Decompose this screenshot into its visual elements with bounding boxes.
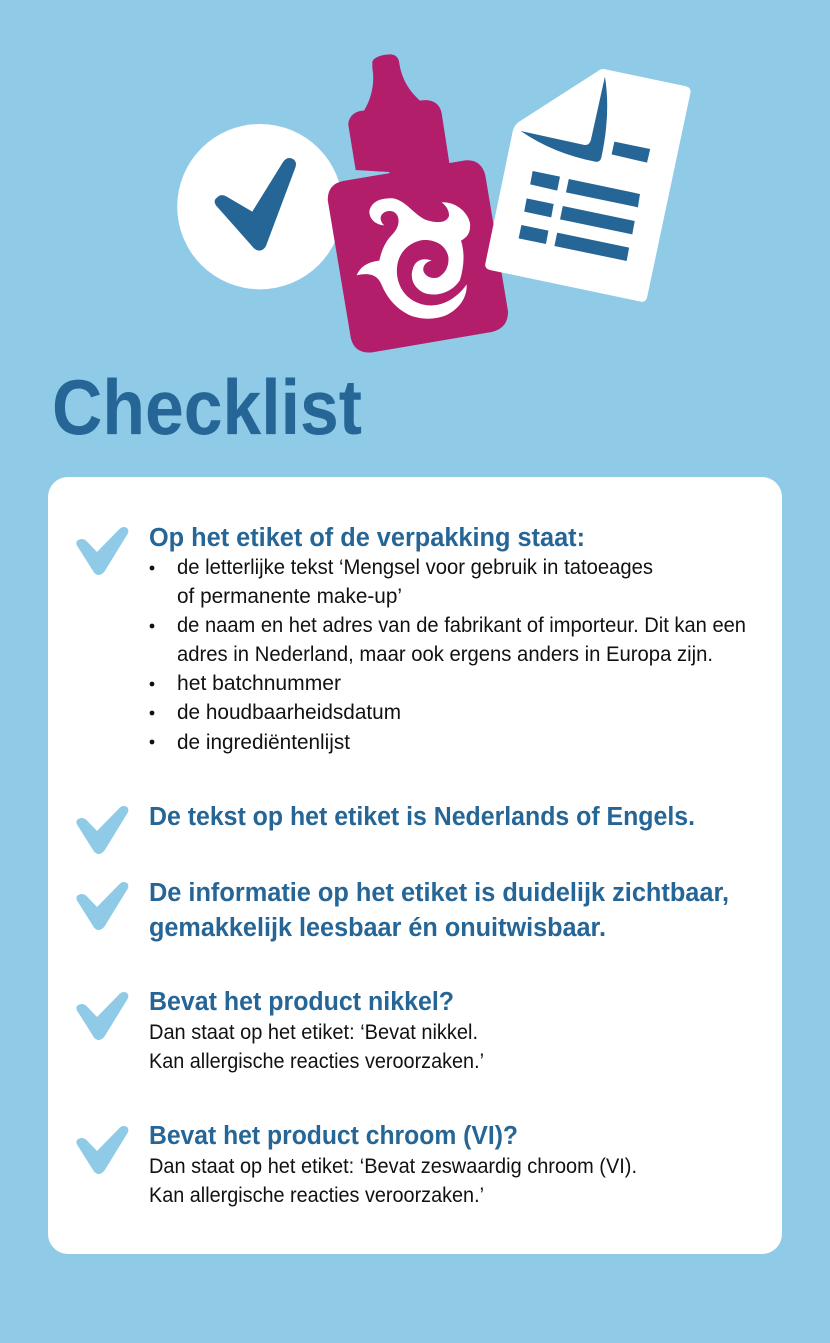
list: required label contents: de letterlijke tekst ‘Mengsel voor gebruik in tatoeages bbox=[177, 556, 653, 579]
text: chromium label wording: Dan staat op het etiket: ‘Bevat zeswaardig chroom (VI). bbox=[149, 1155, 637, 1178]
title: Checklist bbox=[52, 363, 362, 451]
icon: white circle with check bbox=[177, 124, 343, 289]
text: chromium label wording bbox=[149, 1155, 637, 1207]
icon: check bbox=[77, 1127, 128, 1173]
list: required label contents: of permanente make-up’ bbox=[177, 585, 402, 608]
heading: legibility: De informatie op het etiket is duidelijk zichtbaar, bbox=[149, 879, 729, 907]
item: legibility bbox=[77, 879, 729, 942]
text: nickel label wording bbox=[149, 1021, 484, 1073]
item: chromium bbox=[77, 1122, 637, 1207]
heading: nickel: Bevat het product nikkel? bbox=[149, 988, 454, 1016]
heading: legibility: gemakkelijk leesbaar én onuitwisbaar. bbox=[149, 914, 606, 942]
list: required label contents: de naam en het adres van de fabrikant of importeur. Dit kan een bbox=[177, 614, 746, 637]
item: label contents bbox=[77, 524, 746, 754]
icon: magenta ink bottle with swirl bbox=[328, 54, 508, 352]
heading: label contents: Op het etiket of de verpakking staat: bbox=[149, 524, 585, 552]
list: required label contents: adres in Nederland, maar ook ergens anders in Europa zijn. bbox=[177, 643, 713, 666]
icon: check bbox=[77, 883, 128, 929]
icon: check bbox=[77, 807, 128, 853]
icon: check bbox=[77, 528, 128, 574]
illustration: checkmark, bottle and document bbox=[177, 54, 691, 352]
text: nickel label wording: Dan staat op het etiket: ‘Bevat nikkel. bbox=[149, 1021, 478, 1044]
panel: checklist card bbox=[48, 477, 782, 1254]
list: required label contents: het batchnummer bbox=[177, 672, 341, 695]
item: nickel bbox=[77, 988, 484, 1073]
icon: check bbox=[77, 993, 128, 1039]
heading: language: De tekst op het etiket is Nederlands of Engels. bbox=[149, 803, 695, 831]
list: required label contents: de ingrediëntenlijst bbox=[177, 731, 350, 754]
text: chromium label wording: Kan allergische reacties veroorzaken.’ bbox=[149, 1184, 484, 1207]
list: required label contents bbox=[150, 556, 746, 754]
heading: chromium: Bevat het product chroom (VI)? bbox=[149, 1122, 518, 1150]
heading: legibility bbox=[149, 879, 729, 942]
icon: document with check and lines bbox=[485, 69, 691, 302]
text: nickel label wording: Kan allergische reacties veroorzaken.’ bbox=[149, 1050, 484, 1073]
item: language bbox=[77, 803, 695, 853]
list: required label contents: de houdbaarheidsdatum bbox=[177, 701, 401, 724]
